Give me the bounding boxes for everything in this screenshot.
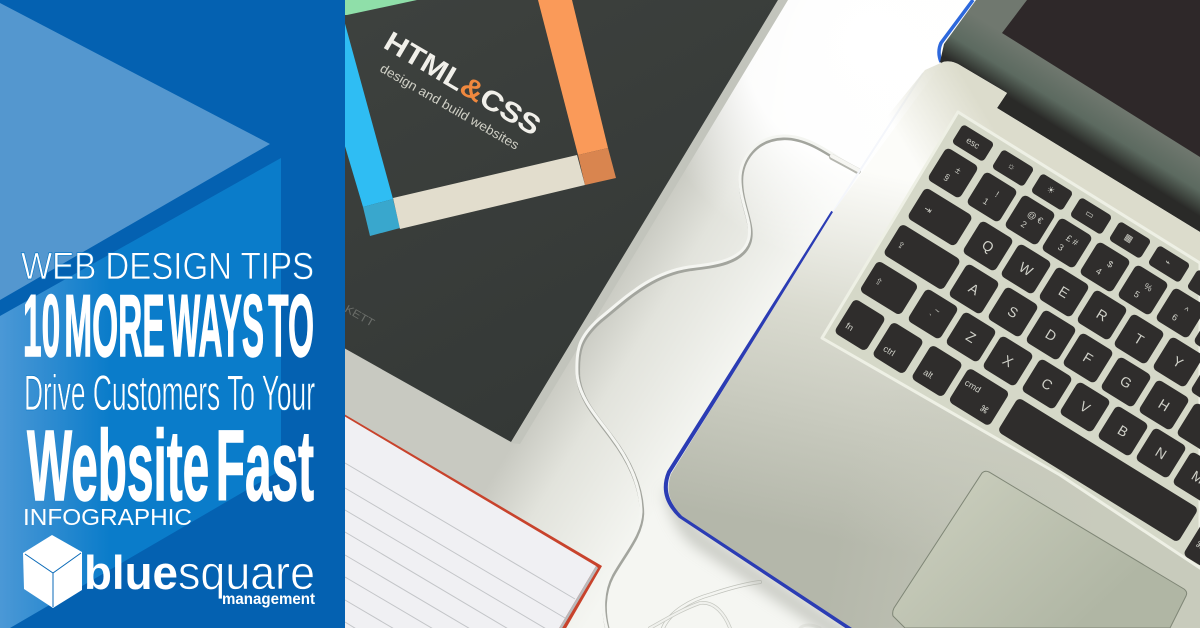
logo: blue square management	[23, 535, 316, 608]
bottom row keys: cmd	[963, 377, 983, 395]
number row keys: 2	[1019, 219, 1029, 230]
QWERTY row keys	[907, 187, 1200, 411]
kicker: web design tips: WEB DESIGN TIPS	[21, 246, 314, 288]
function row keys: esc	[964, 135, 982, 151]
function row keys: ▭	[1084, 208, 1096, 221]
number row keys: !	[993, 189, 1001, 199]
decorative light blue triangle	[0, 3, 270, 300]
number row keys: 6	[1170, 312, 1180, 323]
logo tagline: management	[222, 591, 316, 608]
shift row keys: V	[1077, 398, 1094, 417]
photo: desk scene with book, notebook and laptop	[342, 0, 1200, 628]
number row keys: 1	[981, 196, 991, 207]
panel: blue title sidebar: Website Fast	[27, 410, 314, 522]
shift row keys: Z	[963, 328, 979, 346]
home row keys: F	[1080, 349, 1096, 367]
number row keys: ^	[1182, 305, 1191, 316]
book subtitle: design and build websites	[378, 61, 522, 153]
number row keys: 4	[1094, 266, 1104, 277]
number row keys: 5	[1132, 289, 1142, 300]
panel: blue title sidebar	[0, 0, 345, 628]
laptop lid blue edge	[939, 0, 973, 62]
logo wordmark: blue	[84, 546, 178, 599]
QWERTY row keys: R	[1093, 306, 1111, 324]
QWERTY row keys: W	[1016, 259, 1036, 280]
book author fragment: KETT	[342, 303, 376, 330]
QWERTY row keys: ⇥	[922, 203, 934, 216]
laptop shadow	[672, 490, 850, 628]
subheading: drive customers to your: Drive Customers To Your	[24, 365, 315, 421]
book cover cream stripe	[393, 155, 585, 229]
laptop screen	[939, 0, 1200, 240]
desk surface	[345, 80, 844, 628]
bottom row keys: fn	[844, 321, 855, 333]
function row keys	[951, 124, 1200, 307]
function row keys: ⌁	[1163, 256, 1173, 268]
number row keys: §	[942, 172, 952, 183]
text: 10 MORE WAYS TO	[23, 276, 314, 375]
shift row keys: `	[925, 312, 933, 322]
keyboard	[834, 124, 1200, 574]
number row keys	[927, 147, 1200, 362]
shift row keys	[859, 260, 1200, 503]
number row keys: %	[1142, 281, 1154, 294]
number row keys: $	[1105, 259, 1115, 270]
bottom row keys: ctrl	[881, 343, 897, 358]
bottom row keys: alt	[922, 367, 935, 381]
QWERTY row keys: E	[1056, 283, 1072, 301]
laptop body	[666, 61, 1200, 628]
number row keys: ±	[953, 165, 963, 176]
shift row keys: ⇧	[873, 275, 885, 288]
shift row keys: ~	[932, 305, 942, 316]
number row keys: 3	[1056, 242, 1066, 253]
home row keys: D	[1042, 326, 1060, 344]
space bar	[997, 397, 1199, 543]
label: infographic: INFOGRAPHIC	[23, 504, 192, 530]
shift row keys: B	[1115, 422, 1131, 440]
book cover orange stripe	[538, 0, 608, 155]
shift row keys: C	[1038, 375, 1056, 393]
book cover green stripe	[344, 0, 417, 15]
number row keys: £ #	[1064, 233, 1080, 248]
trackpad	[893, 471, 1187, 628]
QWERTY row keys: Y	[1170, 353, 1187, 372]
icon: white cube	[23, 535, 82, 608]
QWERTY row keys: Q	[979, 236, 997, 256]
function row keys: ▦	[1123, 232, 1135, 245]
home row keys: A	[966, 280, 983, 299]
shift row keys: N	[1152, 444, 1170, 462]
bottom row keys	[834, 298, 1200, 574]
home row keys: G	[1117, 372, 1135, 392]
function row keys: ☼	[1006, 160, 1018, 173]
home row keys: ⇪	[895, 239, 907, 251]
home row keys	[883, 223, 1200, 454]
bottom row keys: ⌘	[978, 403, 991, 416]
notebook	[344, 414, 602, 628]
screen display	[1002, 0, 1200, 157]
logo: blue square management: square	[178, 546, 315, 599]
decorative mid blue shape	[0, 158, 281, 628]
keyboard well	[822, 112, 1200, 568]
home row keys: H	[1155, 396, 1173, 414]
number row keys: @ €	[1025, 209, 1045, 226]
book: HTML and CSS	[342, 0, 788, 444]
function row keys: ☀	[1045, 184, 1057, 196]
book title: HTML&CSS	[379, 25, 546, 141]
laptop blue edge	[666, 212, 852, 628]
book cover blue stripe	[344, 20, 393, 207]
QWERTY row keys: T	[1131, 330, 1147, 348]
earphone cable	[577, 136, 858, 628]
home row keys: S	[1005, 303, 1021, 321]
shift row keys: X	[1000, 352, 1017, 371]
